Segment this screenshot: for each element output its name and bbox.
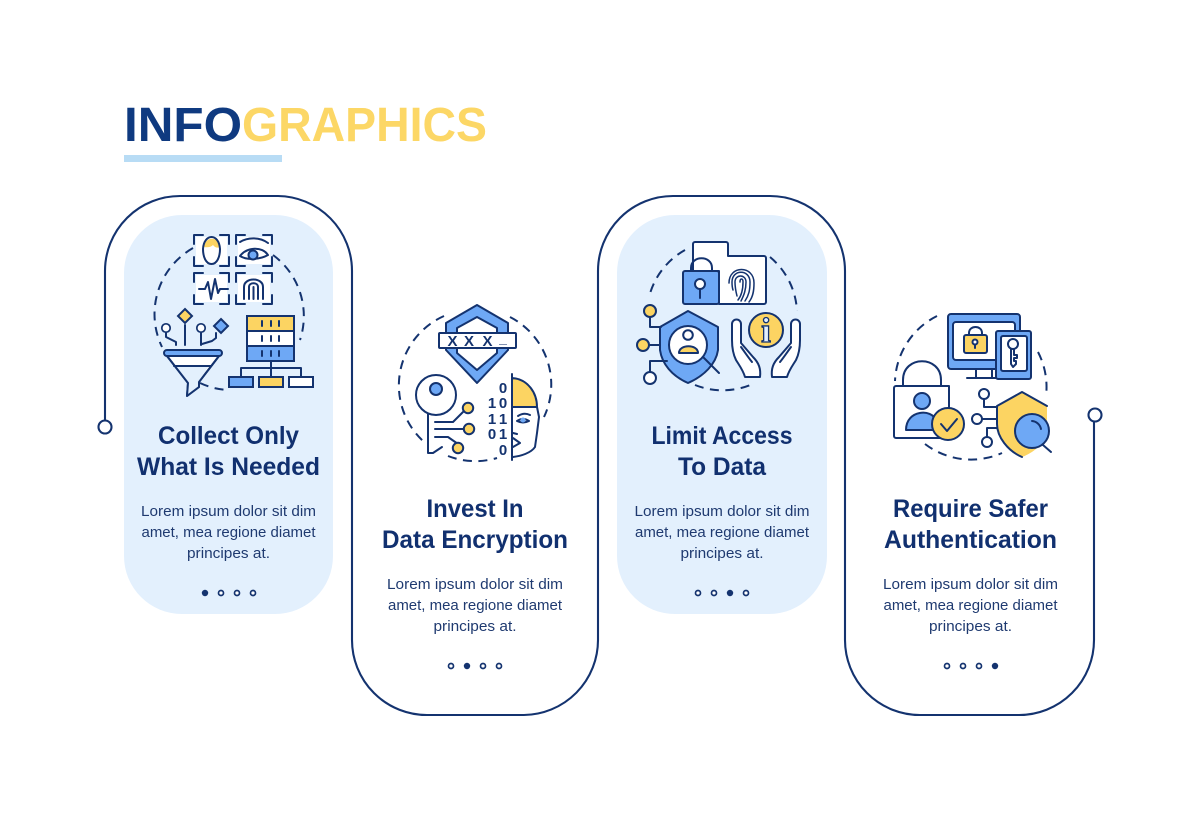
pagination dots: step 1 [202, 590, 256, 596]
heading: step 1: What Is Needed [137, 453, 320, 481]
pagination dots: step 4 [944, 663, 998, 669]
text: step 2 [387, 576, 563, 635]
text: step 2: amet, mea regione diamet [388, 597, 563, 614]
text: step 4: principes at. [929, 618, 1012, 635]
text: step 2: principes at. [434, 618, 516, 635]
text: step 4: amet, mea regione diamet [884, 597, 1058, 614]
heading: step 1: Collect Only [158, 422, 299, 450]
icon: data encryption: 1 [499, 426, 507, 443]
heading: step 4: Require Safer [893, 495, 1048, 523]
icon: data encryption: 0 [499, 395, 507, 412]
icon: data encryption: 1 [488, 411, 496, 428]
heading: step 2: Data Encryption [382, 526, 568, 554]
icon: data encryption: _ [498, 330, 507, 346]
text: step 3 [634, 503, 810, 562]
heading: step 1 [137, 422, 320, 481]
connecting outline [105, 196, 1094, 715]
heading: step 4: Authentication [884, 526, 1057, 554]
text: step 3: Lorem ipsum dolor sit dim [634, 503, 810, 520]
icon: data encryption: X [447, 333, 458, 350]
text: step 1 [141, 503, 316, 562]
right end dot [1088, 408, 1102, 422]
pagination dots: step 2 [448, 663, 502, 669]
text: step 4 [883, 576, 1058, 635]
text: step 1: amet, mea regione diamet [142, 524, 316, 541]
heading: step 3: To Data [678, 453, 767, 481]
text: step 3: amet, mea regione diamet [635, 524, 810, 541]
icon: data encryption [399, 305, 551, 461]
icon: data encryption: 1 [499, 411, 507, 428]
pagination dots: step 3 [696, 590, 748, 596]
heading: step 2: Invest In [426, 495, 524, 523]
text: step 4: Lorem ipsum dolor sit dim [883, 576, 1058, 593]
icon: limit access [637, 242, 800, 390]
panel: step 1 background [124, 215, 333, 614]
icon: data encryption: 0 [499, 442, 507, 459]
icon: data encryption: X [464, 333, 474, 350]
title [124, 99, 487, 152]
title: INFO [124, 99, 242, 152]
text: step 2: Lorem ipsum dolor sit dim [387, 576, 563, 593]
icon: safer authentication [894, 314, 1051, 460]
panel: step 3 background [617, 215, 827, 614]
icon: data encryption: 1 [488, 395, 496, 412]
icon: data encryption: 0 [488, 426, 496, 443]
icon: data collection funnel [155, 235, 313, 396]
icon: data encryption: 0 [499, 380, 507, 397]
title underline [124, 155, 282, 162]
left end dot [98, 420, 112, 434]
heading: step 4 [884, 495, 1057, 554]
heading: step 3: Limit Access [652, 422, 792, 450]
text: step 1: Lorem ipsum dolor sit dim [141, 503, 316, 520]
icon: limit access: i [761, 311, 771, 350]
text: step 1: principes at. [187, 545, 270, 562]
title: GRAPHICS [242, 99, 487, 152]
icon: data encryption: X [482, 333, 493, 350]
heading: step 2 [382, 495, 568, 554]
text: step 3: principes at. [680, 545, 764, 562]
heading: step 3 [652, 422, 792, 481]
